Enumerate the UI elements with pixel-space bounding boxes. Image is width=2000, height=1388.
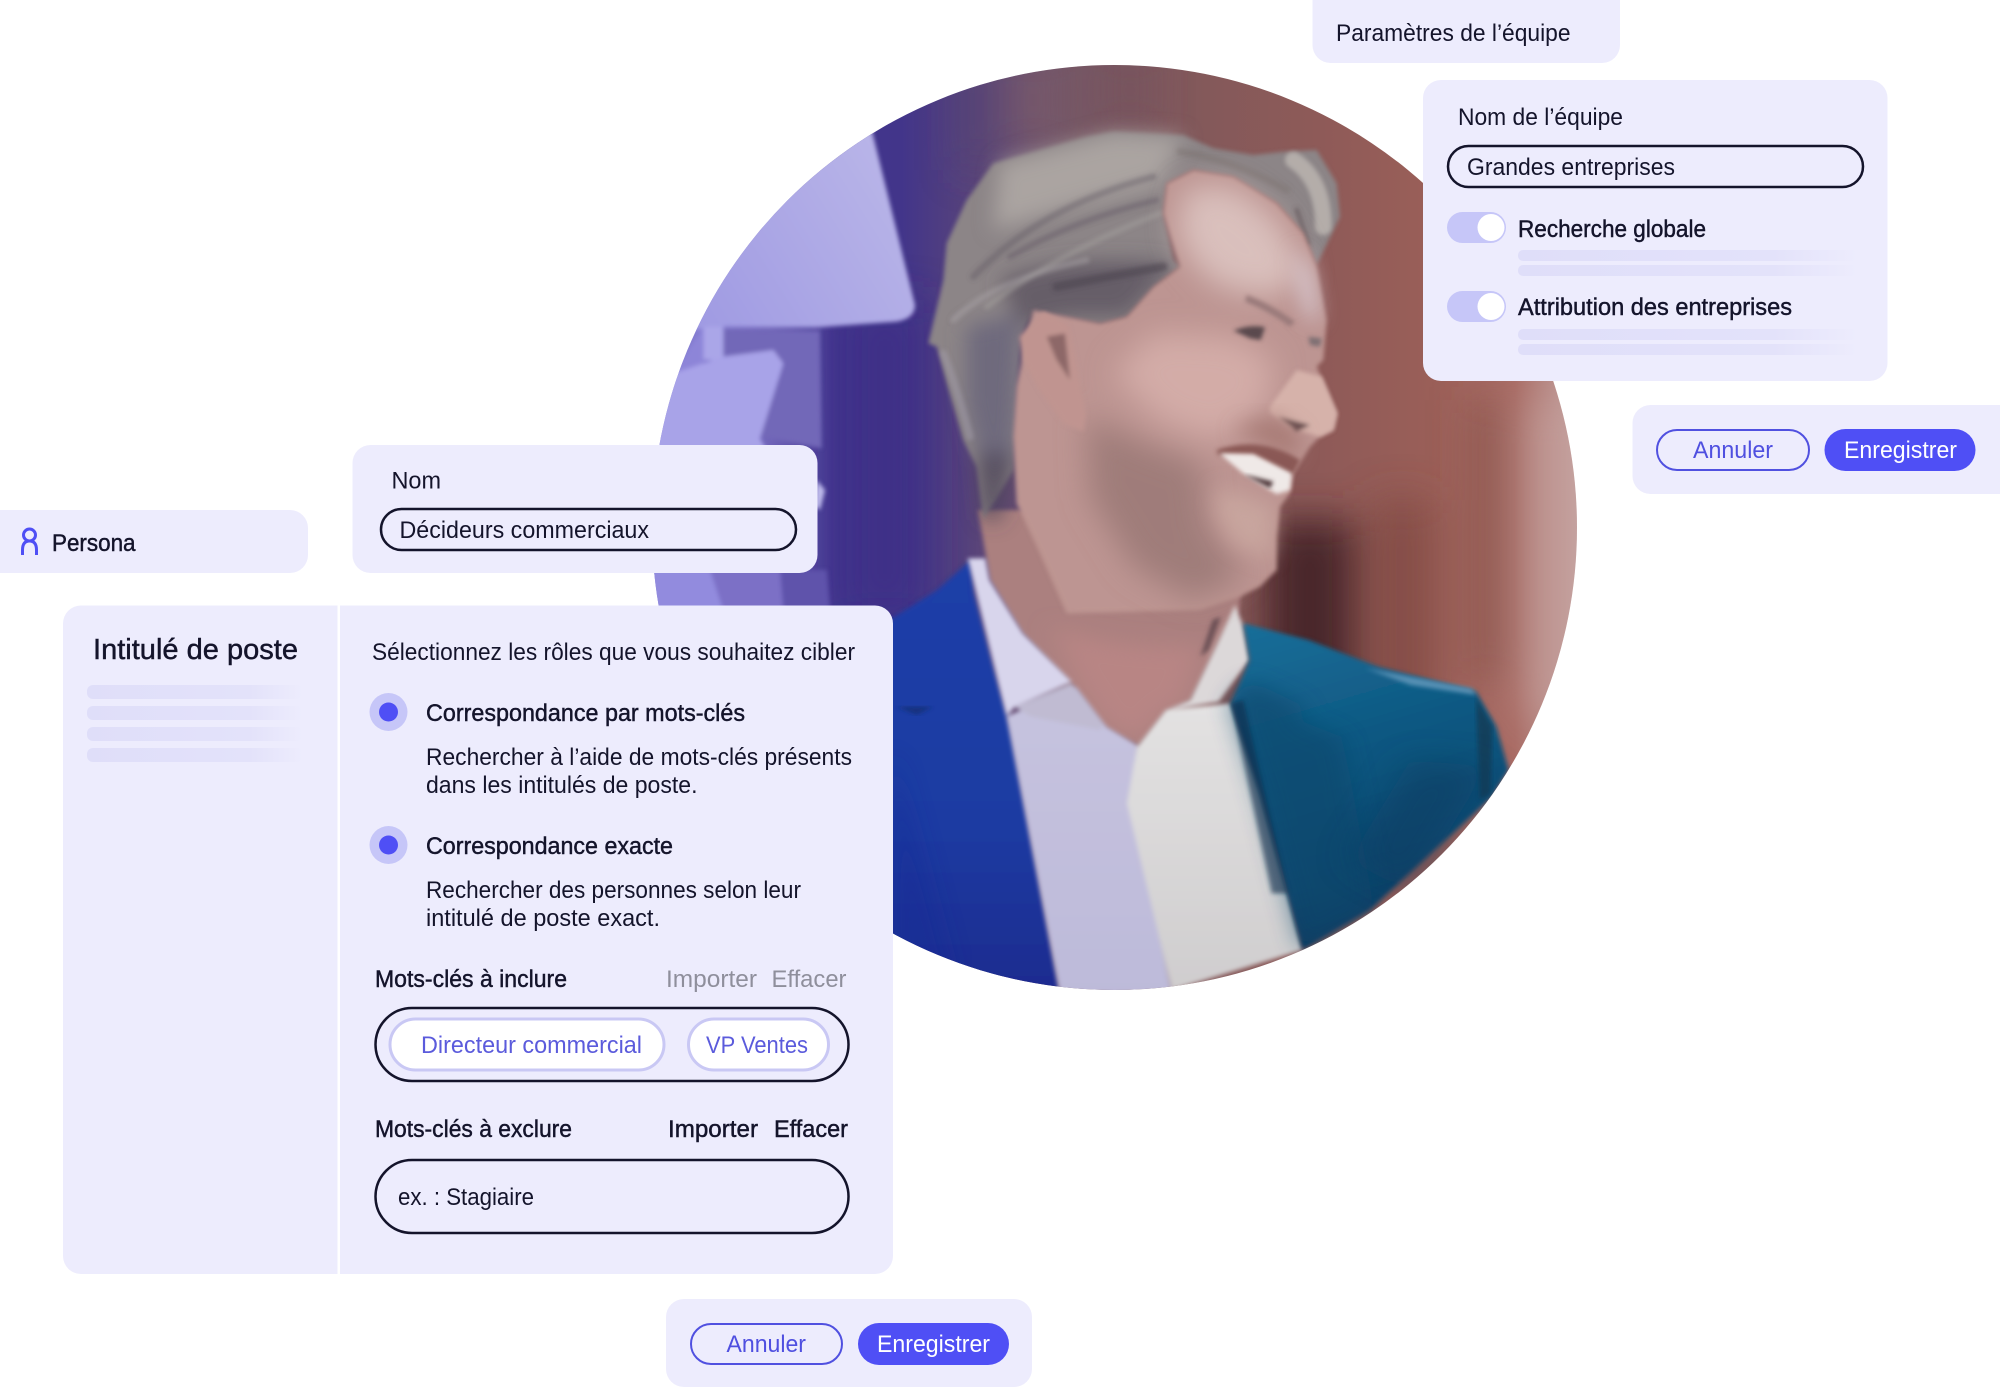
button: enregistrer: Enregistrer [1844, 437, 1957, 464]
input: décideurs commerciaux [381, 509, 796, 550]
button: annuler: Annuler [1693, 437, 1773, 464]
text: exact description [426, 877, 801, 932]
panel: team settings [1423, 80, 1888, 381]
action: effacer disabled: Effacer [772, 966, 846, 993]
shirt [968, 558, 1302, 993]
heading: intitulé de poste: Intitulé de poste [93, 634, 298, 666]
input: décideurs commerciaux: Décideurs commerciaux [400, 517, 649, 544]
chip: directeur commercial: Directeur commercial [421, 1032, 642, 1059]
radio: correspondance exacte [370, 826, 673, 864]
text: exact description: intitulé de poste exact. [426, 905, 660, 932]
label: nom: Nom [392, 468, 441, 494]
toggle: attribution des entreprises [1447, 291, 1792, 322]
action: importer: Importer [668, 1116, 758, 1143]
skeleton lines [87, 685, 303, 762]
text: keyword description [426, 744, 852, 799]
neck [978, 510, 1247, 745]
skeleton lines [1518, 329, 1858, 355]
chip: vp ventes [688, 1019, 828, 1070]
exclude keywords field: ex. : Stagiaire [398, 1184, 534, 1211]
button: enregistrer: Enregistrer [877, 1331, 990, 1358]
toggle: attribution des entreprises: Attribution des entreprises [1518, 294, 1792, 321]
curtain background [640, 50, 1590, 1000]
panel: team actions [1632, 405, 2000, 494]
hair [928, 132, 1340, 520]
panel: job title form [63, 606, 893, 1274]
radio: correspondance par mots-clés: Correspondance par mots-clés [426, 700, 745, 727]
jacket right [1230, 623, 1509, 950]
head [928, 132, 1340, 613]
heading: paramètres de l'équipe: Paramètres de l’équipe [1336, 20, 1570, 47]
button: enregistrer [1824, 429, 1976, 471]
nose [1270, 370, 1337, 437]
radio: correspondance exacte: Correspondance exacte [426, 833, 673, 860]
divider [338, 606, 340, 1274]
toggle: recherche globale [1447, 212, 1706, 243]
chip: vp ventes: VP Ventes [706, 1032, 808, 1059]
button: annuler [1657, 430, 1809, 470]
text: keyword description: Rechercher à l’aide de mots-clés présents [426, 744, 852, 771]
text: exact description: Rechercher des personnes selon leur [426, 877, 801, 904]
button: enregistrer [858, 1323, 1009, 1365]
input: grandes entreprises [1448, 146, 1863, 187]
button: annuler: Annuler [726, 1331, 806, 1358]
label: nom de l'équipe: Nom de l’équipe [1458, 104, 1623, 131]
photo: smiling man in circular crop [640, 50, 1590, 1000]
exclude keywords field [376, 1160, 848, 1233]
input: grandes entreprises: Grandes entreprises [1467, 154, 1675, 181]
face [1013, 170, 1337, 613]
chip: directeur commercial [390, 1019, 664, 1070]
mouth and teeth [1217, 417, 1300, 494]
eyes and eyebrow [1233, 295, 1322, 347]
radio: correspondance par mots-clés [370, 693, 745, 731]
label: mots-clés à exclure: Mots-clés à exclure [375, 1116, 572, 1143]
text: keyword description: dans les intitulés de poste. [426, 772, 698, 799]
action: effacer: Effacer [774, 1116, 848, 1143]
label: persona: Persona [52, 530, 136, 557]
toggle: recherche globale: Recherche globale [1518, 216, 1706, 243]
button: annuler [691, 1324, 842, 1364]
man figure [892, 122, 1511, 990]
label: mots-clés à inclure: Mots-clés à inclure [375, 966, 567, 993]
ear [1019, 312, 1086, 432]
skeleton lines [1518, 250, 1858, 276]
panel: nom [352, 445, 818, 573]
icon: person [22, 529, 36, 555]
panel: persona tag [0, 510, 308, 573]
lamps [640, 130, 915, 610]
instruction text: Sélectionnez les rôles que vous souhaitez cibler [372, 639, 855, 666]
panel: form actions [666, 1299, 1032, 1387]
panel: équipe header [1312, 0, 1620, 63]
include keywords field [376, 1008, 848, 1081]
action: importer disabled: Importer [666, 966, 757, 993]
jacket left [892, 560, 1060, 987]
